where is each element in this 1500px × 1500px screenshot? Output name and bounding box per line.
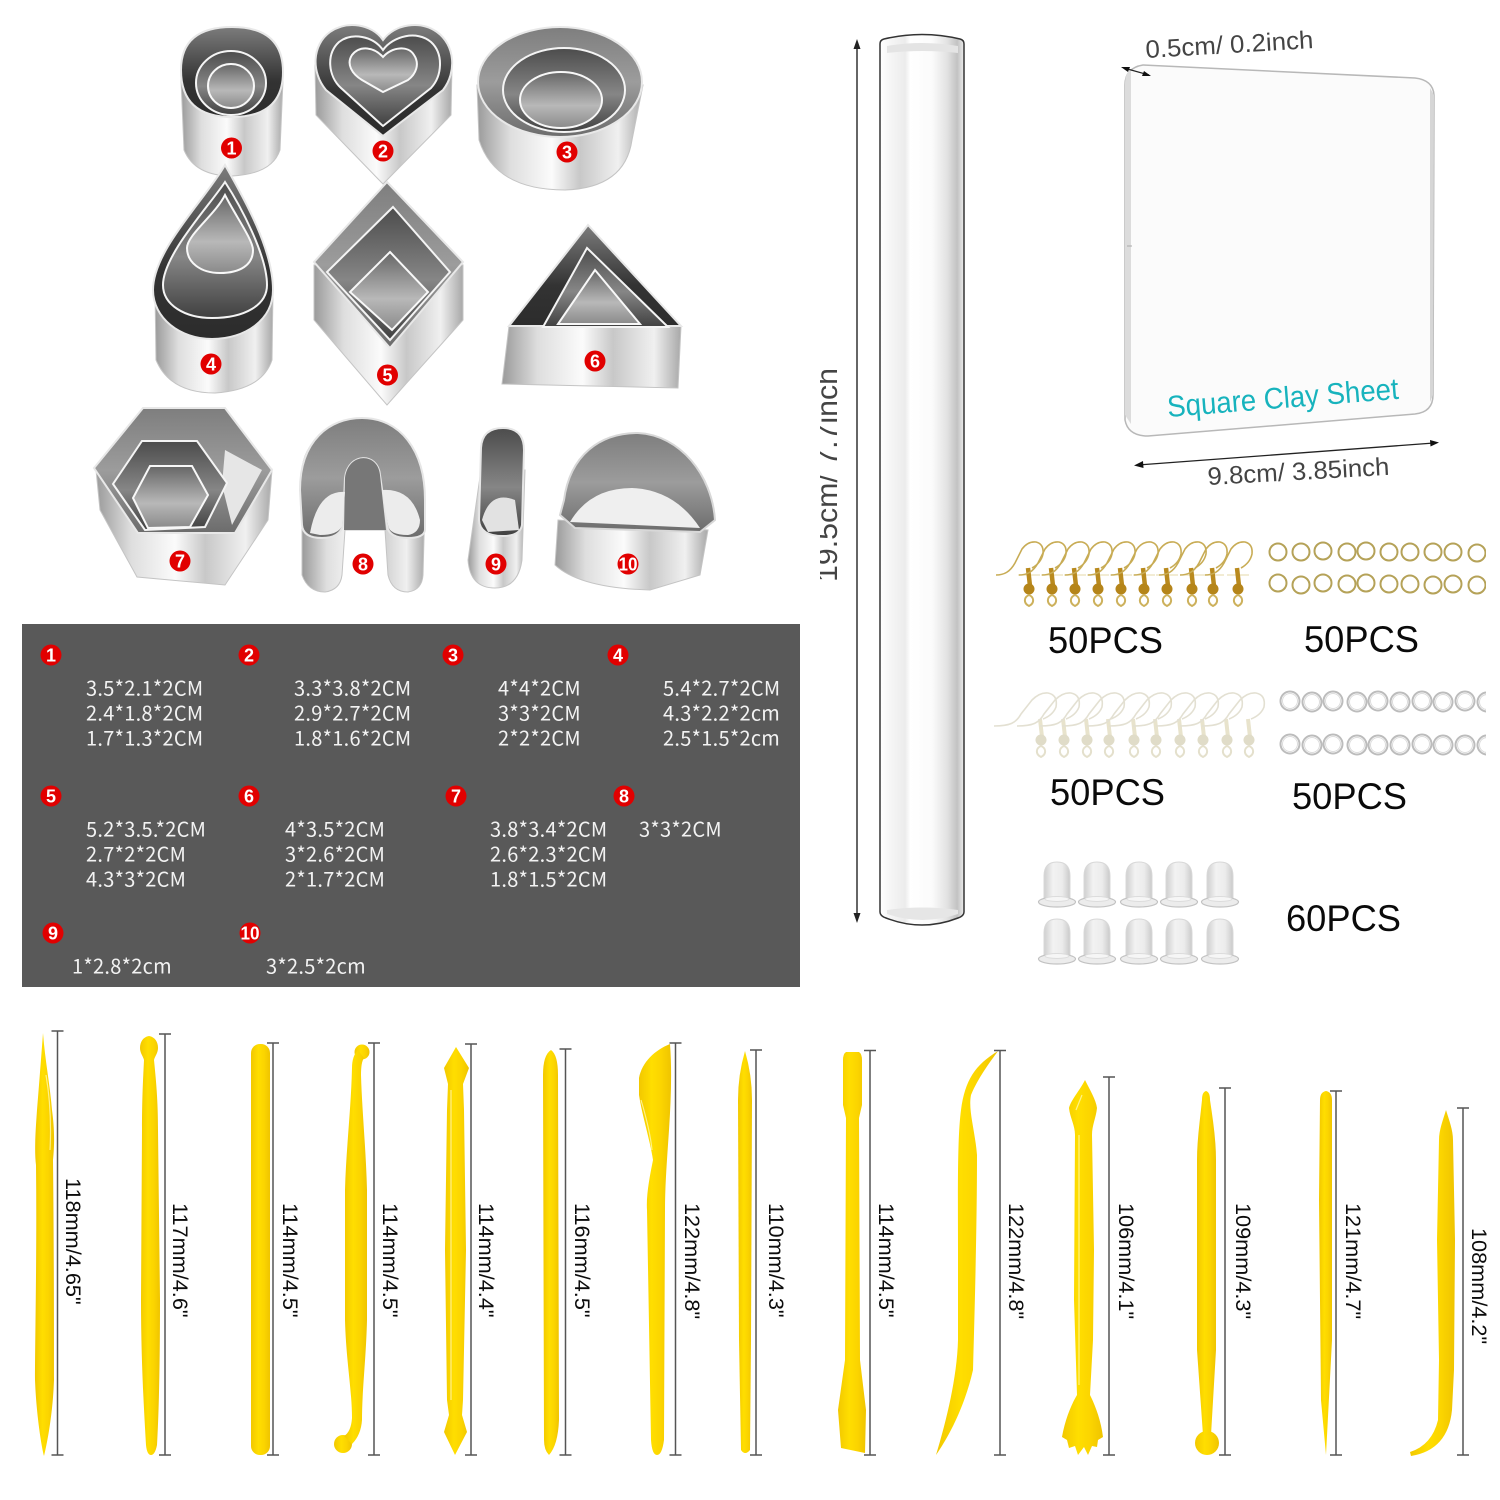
earring backs: [1038, 862, 1238, 964]
cutter 10: rounded D: [555, 433, 715, 590]
badge 9: 9: [491, 554, 501, 574]
tool 3: 114mm/4.5": [278, 1203, 303, 1318]
tool 13: 121mm/4.7": [1341, 1203, 1366, 1319]
tool 12: ball end: 109mm/4.3": [1231, 1203, 1256, 1319]
count: earring backs: 60PCS: [1286, 898, 1401, 939]
size list text: 1.8*1.6*2CM: [294, 722, 411, 752]
badge 3: 3: [562, 142, 572, 162]
badge 1: [221, 138, 242, 158]
size list text: 1.8*1.5*2CM: [490, 864, 607, 892]
badge 9: [486, 554, 506, 574]
size list text: 3*2.5*2cm: [266, 950, 366, 980]
cutter 4: teardrop: [153, 165, 273, 393]
label: width: 9.8cm/ 3.85inch: [1207, 453, 1390, 491]
badge 5: 5: [382, 366, 393, 386]
tool 14: hook tail: 108mm/4.2": [1467, 1228, 1492, 1344]
count: gold hooks: 50PCS: [1048, 620, 1163, 661]
badge 2: [372, 140, 394, 162]
size list text: 1*2.8*2cm: [72, 950, 172, 980]
badge 10: 10: [618, 554, 638, 574]
size list text: 4.3*2.2*2cm: [663, 698, 780, 726]
arrow: rolling pin length: [854, 39, 860, 923]
badge 6: 6: [590, 352, 600, 372]
size list text: 3*3*2CM: [639, 814, 722, 842]
badge 4: 4: [206, 354, 216, 374]
tool 10: curved: [936, 1050, 1029, 1455]
gold jump rings: [1270, 542, 1486, 594]
acrylic rod: [880, 34, 964, 925]
tool 8: [738, 1050, 789, 1455]
numbered badges: 5: [46, 786, 56, 806]
badge 1: 1: [226, 138, 237, 158]
tool 7: knife: [639, 1043, 705, 1455]
badge 2: 2: [378, 142, 388, 162]
numbered badges: 4: [613, 646, 623, 666]
size list text: 3.5*2.1*2CM: [86, 672, 203, 702]
badge 7: 7: [175, 552, 185, 572]
tool 11: leaf and fan: [1062, 1077, 1139, 1455]
numbered badges: 2: [244, 646, 254, 666]
panel: yellow sculpting tools: [35, 1031, 1492, 1456]
size list text: 5.4*2.7*2CM: [663, 672, 780, 702]
numbered badges: 8: [619, 786, 629, 806]
badge 4: [200, 354, 222, 374]
silver jump rings: [1280, 692, 1496, 754]
sheet: [1125, 65, 1434, 436]
tool 2: [140, 1034, 193, 1455]
tool 5: [444, 1044, 499, 1455]
count: gold rings: 50PCS: [1304, 619, 1419, 660]
label: square clay sheet: Square Clay Sheet: [1166, 373, 1400, 424]
size list text: 4*4*2CM: [498, 672, 581, 702]
badge 7: [170, 550, 190, 572]
badge 5: [377, 364, 398, 386]
tool 6: 116mm/4.5": [570, 1203, 595, 1318]
cutter 7: hexagon: [94, 408, 272, 585]
tool 6: [543, 1049, 595, 1455]
tool 2: 117mm/4.6": [168, 1203, 193, 1318]
numbered badges: 1: [46, 646, 56, 666]
tool 4: [334, 1043, 403, 1455]
count: silver hooks: 50PCS: [1050, 772, 1165, 813]
size list text: 2.7*2*2CM: [86, 838, 186, 868]
numbered badges: 6: [244, 786, 254, 806]
tool 14: hook tail: [1410, 1108, 1492, 1456]
numbered badges: 9: [48, 924, 58, 944]
size list text: 3.8*3.4*2CM: [490, 814, 607, 842]
tool 7: knife: 122mm/4.8": [680, 1203, 705, 1319]
panel: metal cutters: [94, 25, 715, 592]
size list text: 5.2*3.5.*2CM: [86, 814, 206, 842]
size list text: 2*1.7*2CM: [285, 864, 385, 892]
gold earring hooks: [996, 542, 1252, 606]
panel: cutter sizes: [22, 624, 800, 987]
cutter 1: oval: [181, 27, 283, 176]
numbered badges: 3: [448, 646, 458, 666]
label: rolling pin length, clipped: 19.5cm/ 7.7inch: [811, 368, 844, 582]
arrow: thickness: [1121, 67, 1151, 76]
size list text: 4*3.5*2CM: [285, 814, 385, 842]
size list text: 2.9*2.7*2CM: [294, 698, 411, 726]
tool 4: 114mm/4.5": [378, 1203, 403, 1318]
cutter 6: triangle: [502, 225, 681, 388]
count: silver rings: 50PCS: [1292, 776, 1407, 817]
size list text: 2.5*1.5*2cm: [663, 722, 780, 752]
tool 5: 114mm/4.4": [474, 1203, 499, 1318]
size list text: 3.3*3.8*2CM: [294, 672, 411, 702]
tool 1: 118mm/4.65": [61, 1178, 86, 1305]
size list text: 3*3*2CM: [498, 698, 581, 726]
cutter 2: heart: [315, 25, 452, 184]
tool 12: ball end: [1195, 1088, 1256, 1455]
cutter 5: rhombus: [314, 182, 463, 405]
arrow: width: [1134, 440, 1439, 468]
badge 6: [584, 350, 606, 372]
cutter 9: narrow oval: [468, 428, 525, 588]
tool 8: 110mm/4.3": [764, 1203, 789, 1318]
tool 13: [1319, 1091, 1366, 1455]
tool 9: spatula: [838, 1050, 899, 1455]
tool 10: curved: 122mm/4.8": [1004, 1203, 1029, 1319]
panel: rolling pin: [811, 34, 964, 925]
size list text: 2.4*1.8*2CM: [86, 698, 203, 726]
cutter 3: circle: [477, 27, 643, 190]
tool 9: spatula: 114mm/4.5": [874, 1203, 899, 1318]
badge 8: 8: [358, 554, 368, 574]
size list text: [72, 672, 780, 980]
size list text: 2*2*2CM: [498, 722, 581, 752]
size list text: 1.7*1.3*2CM: [86, 722, 203, 752]
numbered badges: 7: [451, 786, 461, 806]
tool 1: [35, 1031, 86, 1456]
tool 3: [251, 1043, 303, 1455]
size list text: 2.6*2.3*2CM: [490, 838, 607, 868]
label: thickness: 0.5cm/ 0.2inch: [1145, 26, 1314, 64]
panel: square clay sheet: [1121, 26, 1439, 491]
numbered badges: 10: [240, 924, 260, 944]
badge 8: [352, 554, 374, 574]
cutter 8: arch: [300, 418, 425, 592]
numbered badges: [40, 644, 634, 944]
tool 11: leaf and fan: 106mm/4.1": [1114, 1203, 1139, 1319]
badge 3: [556, 142, 578, 162]
silver earring hooks: [994, 693, 1264, 757]
size list text: 3*2.6*2CM: [285, 838, 385, 868]
size list text: 4.3*3*2CM: [86, 864, 186, 892]
